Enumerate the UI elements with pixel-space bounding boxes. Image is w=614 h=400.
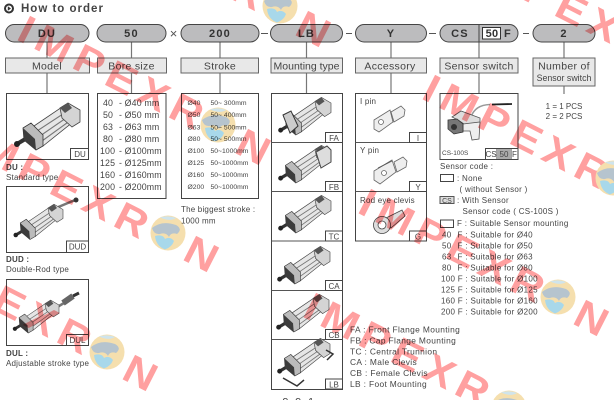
panel: stroke table: 50~ 400mm	[210, 112, 247, 119]
tag: CS 50 F: 50	[500, 150, 509, 159]
heading: Model	[6, 58, 90, 73]
text: suitability list: 200 F : Suitable for Ø200	[441, 308, 538, 316]
tag: CA	[326, 280, 342, 291]
text: suitability list: F : Suitable Sensor mounting	[457, 219, 569, 228]
pill: CS 50 F: F	[504, 28, 512, 40]
heading: Bore size	[98, 58, 166, 73]
swatch: F blank	[440, 220, 454, 228]
pill: Y: Y	[387, 28, 395, 40]
text: with sensor: Sensor code ( CS-100S )	[462, 207, 559, 216]
watermark row 2	[72, 0, 344, 59]
text: with sensor: : With Sensor	[457, 196, 509, 205]
icon: I pin	[374, 106, 405, 132]
tag: I	[410, 132, 426, 143]
heading: Mounting type: Mounting type	[274, 60, 340, 72]
pill: 2: 2	[560, 28, 568, 40]
heading: Number of Sensor switch: Number of	[538, 60, 590, 72]
pill: 200	[181, 24, 259, 42]
icon: Y pin	[374, 157, 407, 184]
panel: bore size list: 50	[103, 110, 113, 120]
text: DUL description: Adjustable stroke type	[6, 359, 89, 368]
separator: dash	[261, 32, 268, 34]
tag: G: G	[415, 232, 421, 242]
icon: DU cylinder	[14, 103, 80, 150]
tag: DUL: DUL	[69, 336, 86, 345]
swatch: none	[440, 174, 454, 182]
icon: Rod eye clevis	[374, 210, 405, 234]
panel: stroke table: Ø200	[188, 184, 204, 191]
heading: Number of Sensor switch	[533, 58, 595, 86]
tag: FB	[326, 182, 342, 192]
tag: CA: CA	[328, 282, 340, 291]
icon: LB cylinder	[277, 338, 333, 386]
heading: Accessory	[356, 58, 426, 73]
heading: Stroke: Stroke	[204, 60, 236, 72]
tag: CS 50 F: CS	[485, 150, 497, 159]
pill: LB	[270, 24, 342, 42]
column headings	[6, 58, 595, 86]
tag: G	[410, 231, 426, 242]
tag: TC	[326, 231, 342, 242]
text: suitability list: F : Suitable for Ø50	[458, 242, 533, 250]
tag: LB: LB	[329, 380, 339, 390]
text: biggest stroke: The biggest stroke :	[181, 205, 255, 214]
watermark row 1: N	[229, 120, 284, 177]
text: mounting legend: TC : Central Trunnion	[350, 346, 437, 356]
tag: FB: FB	[329, 183, 339, 192]
pill: DU	[6, 24, 89, 42]
panel: stroke table: Ø40	[188, 100, 201, 107]
text: mounting legend: CA : Male Clevis	[350, 357, 417, 367]
text: sensor code heading: Sensor code :	[440, 162, 493, 171]
tag: CS 50 F	[485, 148, 518, 160]
icon: FA cylinder	[278, 97, 331, 135]
panel: stroke table: Ø125	[188, 160, 204, 167]
text: number of switches: 2 = 2 PCS	[546, 112, 582, 121]
panel: stroke table: 50~ 300mm	[210, 100, 247, 107]
panel: bore size list: - Ø63 mm	[119, 122, 159, 132]
panel: bore size list: - Ø125mm	[119, 158, 162, 168]
swatch: CS	[440, 196, 454, 205]
text: suitability list: 40	[442, 230, 452, 240]
pill: 50: 50	[124, 28, 139, 40]
separator: dash	[429, 32, 436, 34]
panel: stroke table: 50~ 500mm	[210, 136, 247, 143]
panel: bore size list: - Ø200mm	[119, 182, 162, 192]
watermark row 3	[0, 116, 232, 284]
text: none: ( without Sensor )	[457, 185, 528, 194]
pill: CS 50 F: 50	[486, 28, 498, 40]
panel: bore size list: 80	[103, 134, 113, 144]
text: none: : None	[457, 174, 482, 183]
text: biggest stroke: 1000 mm	[181, 216, 216, 226]
heading: Number of Sensor switch: Sensor switch	[537, 73, 591, 83]
watermark row 1: IMPEXR	[11, 7, 217, 141]
panel: bore size list: 40	[103, 98, 113, 108]
icon: DUL cylinder	[13, 293, 79, 333]
panel: model DUL	[6, 280, 88, 346]
tag: DUD: DUD	[69, 242, 86, 252]
text: Y pin: Y pin	[360, 146, 379, 155]
text: DUL description: DUL :	[6, 349, 28, 358]
heading: Accessory: Accessory	[364, 60, 416, 72]
panel: stroke table: Ø50	[188, 112, 201, 119]
watermark row 1	[11, 7, 284, 177]
panel: stroke table: 50~1000mm	[210, 148, 249, 155]
panel: stroke table: Ø80	[188, 136, 201, 143]
panel: stroke table: 50~ 500mm	[210, 124, 247, 132]
icon: CB cylinder	[276, 294, 329, 332]
panel: bore size list: - Ø50 mm	[119, 110, 159, 120]
tag: FA	[326, 132, 342, 143]
separator: times: ×	[170, 26, 177, 41]
tag: CS 50 F: F	[512, 150, 517, 159]
icon: DUD cylinder	[14, 198, 78, 240]
panel: bore size list: 160	[100, 170, 115, 180]
panel: bore size list: - Ø100mm	[119, 146, 162, 156]
panel: stroke table: 50~1000mm	[210, 172, 249, 179]
panel: model DUD	[6, 186, 88, 252]
tag: Y: Y	[415, 183, 421, 192]
separator: dash	[523, 32, 529, 34]
panel: accessory	[356, 94, 426, 242]
text: suitability list: 125 F : Suitable for Ø125	[441, 286, 538, 294]
panel: stroke table	[182, 94, 258, 198]
heading: Stroke	[181, 58, 258, 73]
tag: DU: DU	[74, 150, 86, 159]
panel: stroke table: Ø63	[188, 124, 201, 132]
text: suitability list: 160 F : Suitable for Ø160	[441, 296, 538, 306]
pill: LB: LB	[298, 28, 315, 40]
panel: stroke table: 50~1000mm	[210, 160, 249, 167]
text: suitability list: F : Suitable for Ø40	[458, 230, 533, 240]
text: CS-100S: CS-100S	[442, 150, 469, 157]
panel: bore size list: - Ø40 mm	[119, 98, 159, 108]
watermark row 4	[0, 232, 171, 400]
icon: CA cylinder	[277, 246, 330, 284]
text: Rod eye clevis: Rod eye clevis	[360, 196, 415, 205]
text: suitability list: 63	[442, 252, 452, 262]
tag: CB	[326, 330, 342, 340]
panel: model DU	[6, 94, 88, 160]
text: mounting legend: FA : Front Flange Mounting	[350, 324, 460, 334]
pill: Y	[356, 24, 426, 42]
swatch: CS: CS	[442, 198, 452, 205]
pill: 2	[533, 24, 595, 42]
icon: sensor	[448, 104, 512, 140]
panel: bore size list: 63	[103, 122, 113, 132]
panel: bore size list: 125	[100, 158, 115, 168]
tag: LB	[326, 379, 342, 390]
text: mounting legend: LB : Foot Mounting	[350, 379, 427, 389]
panel: stroke table: Ø160	[188, 172, 204, 179]
panel: bore size list: 200	[100, 182, 115, 192]
title: How to order	[21, 3, 104, 15]
pill: CS 50 F	[440, 24, 518, 42]
text: suitability list: 100 F : Suitable for Ø100	[441, 274, 538, 284]
text: suitability list: F : Suitable for Ø80	[458, 264, 533, 272]
panel: stroke table: Ø100	[188, 148, 204, 155]
tag: CB: CB	[328, 331, 340, 340]
text: suitability list: 80	[442, 264, 452, 272]
text: I pin: I pin	[360, 97, 376, 106]
heading: Model: Model	[32, 60, 62, 72]
panel: bore size list: - Ø80 mm	[119, 134, 159, 144]
tag: Y	[410, 182, 426, 192]
panel: bore size list	[98, 94, 166, 198]
text: suitability list: 50	[442, 242, 452, 250]
tags	[326, 132, 342, 390]
watermark row 2: N	[289, 2, 344, 59]
panel: bore size list: 100	[100, 146, 115, 156]
text: mounting legend: FB : Cap Flange Mounting	[350, 336, 456, 346]
sensor code legend	[440, 162, 571, 316]
tag: FA: FA	[329, 134, 340, 143]
text: mounting legend: CB : Female Clevis	[350, 368, 428, 378]
icon: title bullet	[5, 4, 13, 12]
heading: Sensor switch: Sensor switch	[444, 60, 514, 72]
text: DUD description: Double-Rod type	[6, 265, 69, 274]
text: DU description: DU :	[6, 163, 23, 172]
pill: DU: DU	[38, 28, 56, 40]
pill: 50	[97, 24, 166, 42]
text: DU description: Standard type	[6, 173, 59, 182]
pill: CS 50 F: CS	[451, 28, 469, 40]
text: number of switches: 1 = 1 PCS	[546, 102, 582, 111]
panel: sensor switch	[440, 94, 518, 160]
icon: TC cylinder	[278, 195, 331, 233]
text: suitability list: F : Suitable for Ø63	[458, 252, 533, 262]
watermark row 6	[352, 180, 614, 348]
watermark row 6: IMPEXR	[352, 180, 558, 314]
icon: FB cylinder	[278, 145, 331, 183]
panel: mounting types	[272, 94, 342, 390]
order code pills	[6, 24, 595, 42]
tag: TC: TC	[329, 232, 340, 242]
tag: I: I	[417, 134, 419, 143]
separator: dash	[346, 32, 352, 34]
heading: Bore size: Bore size	[108, 60, 155, 72]
pill: 200: 200	[209, 28, 231, 40]
watermark row 3: N	[177, 227, 232, 284]
panel: stroke table: 50~1000mm	[210, 184, 249, 191]
connector lines	[47, 25, 564, 94]
text: DUD description: DUD :	[6, 255, 29, 264]
panel: bore size list: - Ø160mm	[119, 170, 162, 180]
